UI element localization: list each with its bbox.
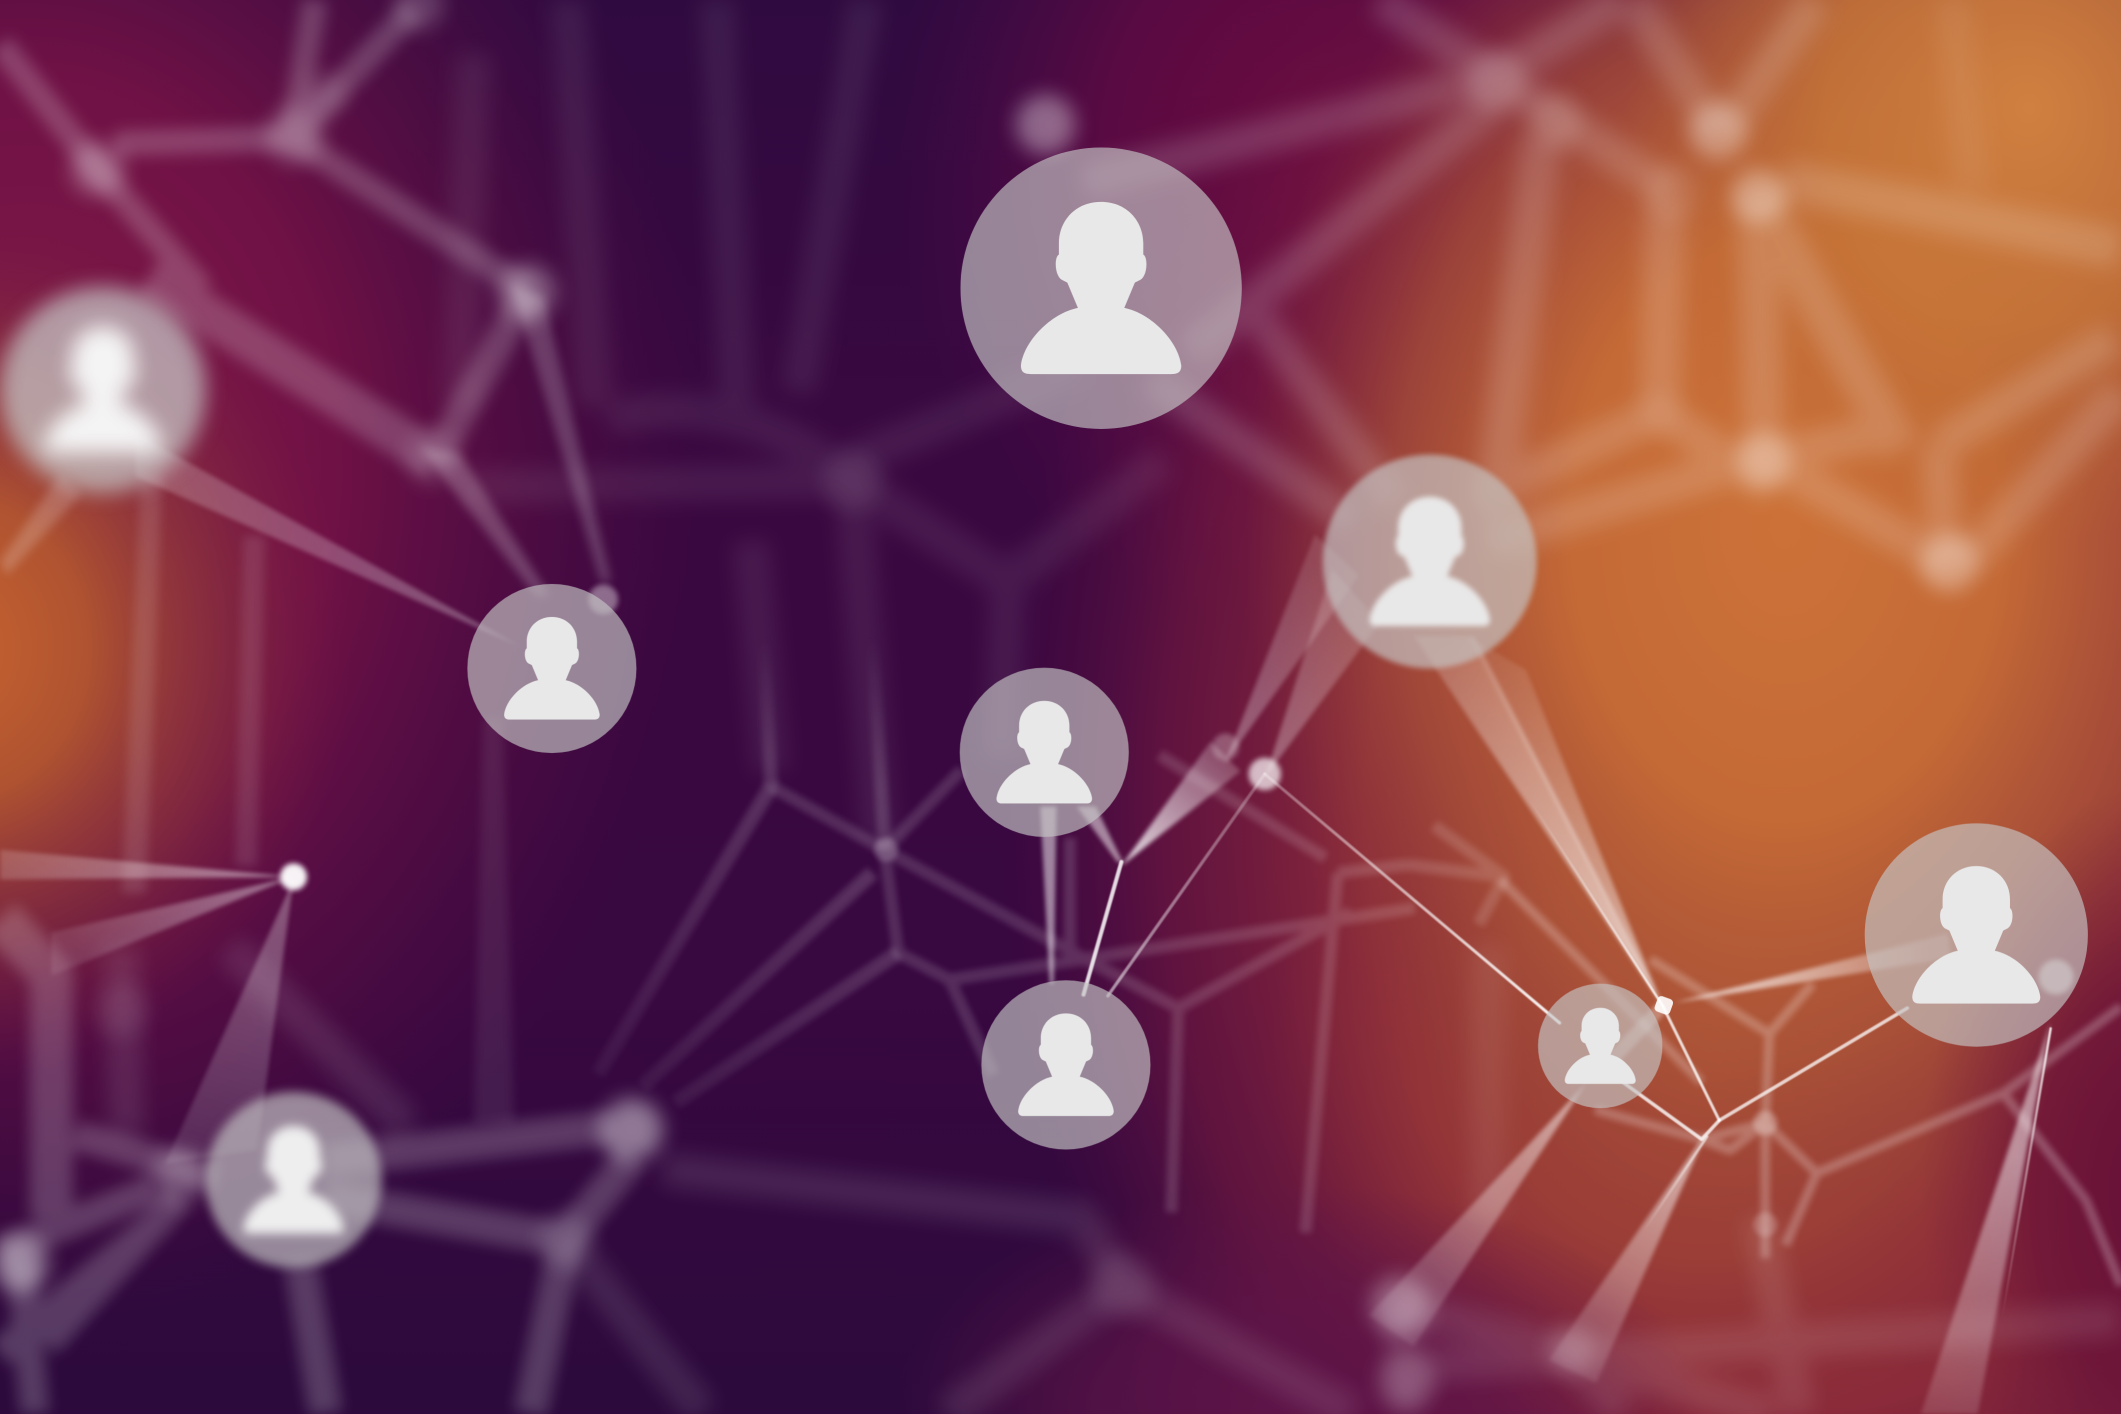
person node: left (467, 584, 636, 753)
person node: centre lower (981, 980, 1150, 1149)
wide blurred mesh: upper left (0, 0, 528, 460)
wide blurred mesh: upper right (1082, 0, 2121, 563)
lower right mesh (1500, 880, 2121, 1285)
sharp connection lines (1083, 774, 2051, 1319)
faint background streaks (460, 0, 1972, 1218)
person node: blurred far left (0, 287, 206, 493)
person node: large top centre (960, 147, 1242, 429)
middle mesh (598, 636, 1504, 1233)
person node: centre upper (960, 668, 1129, 837)
wide blurred mesh: lower left (0, 919, 632, 1414)
person node: small right (1538, 984, 1662, 1108)
faint mesh around the lower left and bottom (122, 947, 2121, 1414)
tapered lines around the left node (0, 284, 611, 1123)
person node: blurred lower left (206, 1092, 381, 1268)
wedge beams (0, 433, 2051, 1414)
person node: large right (1865, 823, 2088, 1047)
person node: blurred right of centre (1323, 455, 1537, 668)
small bright nodes (280, 585, 2074, 1237)
